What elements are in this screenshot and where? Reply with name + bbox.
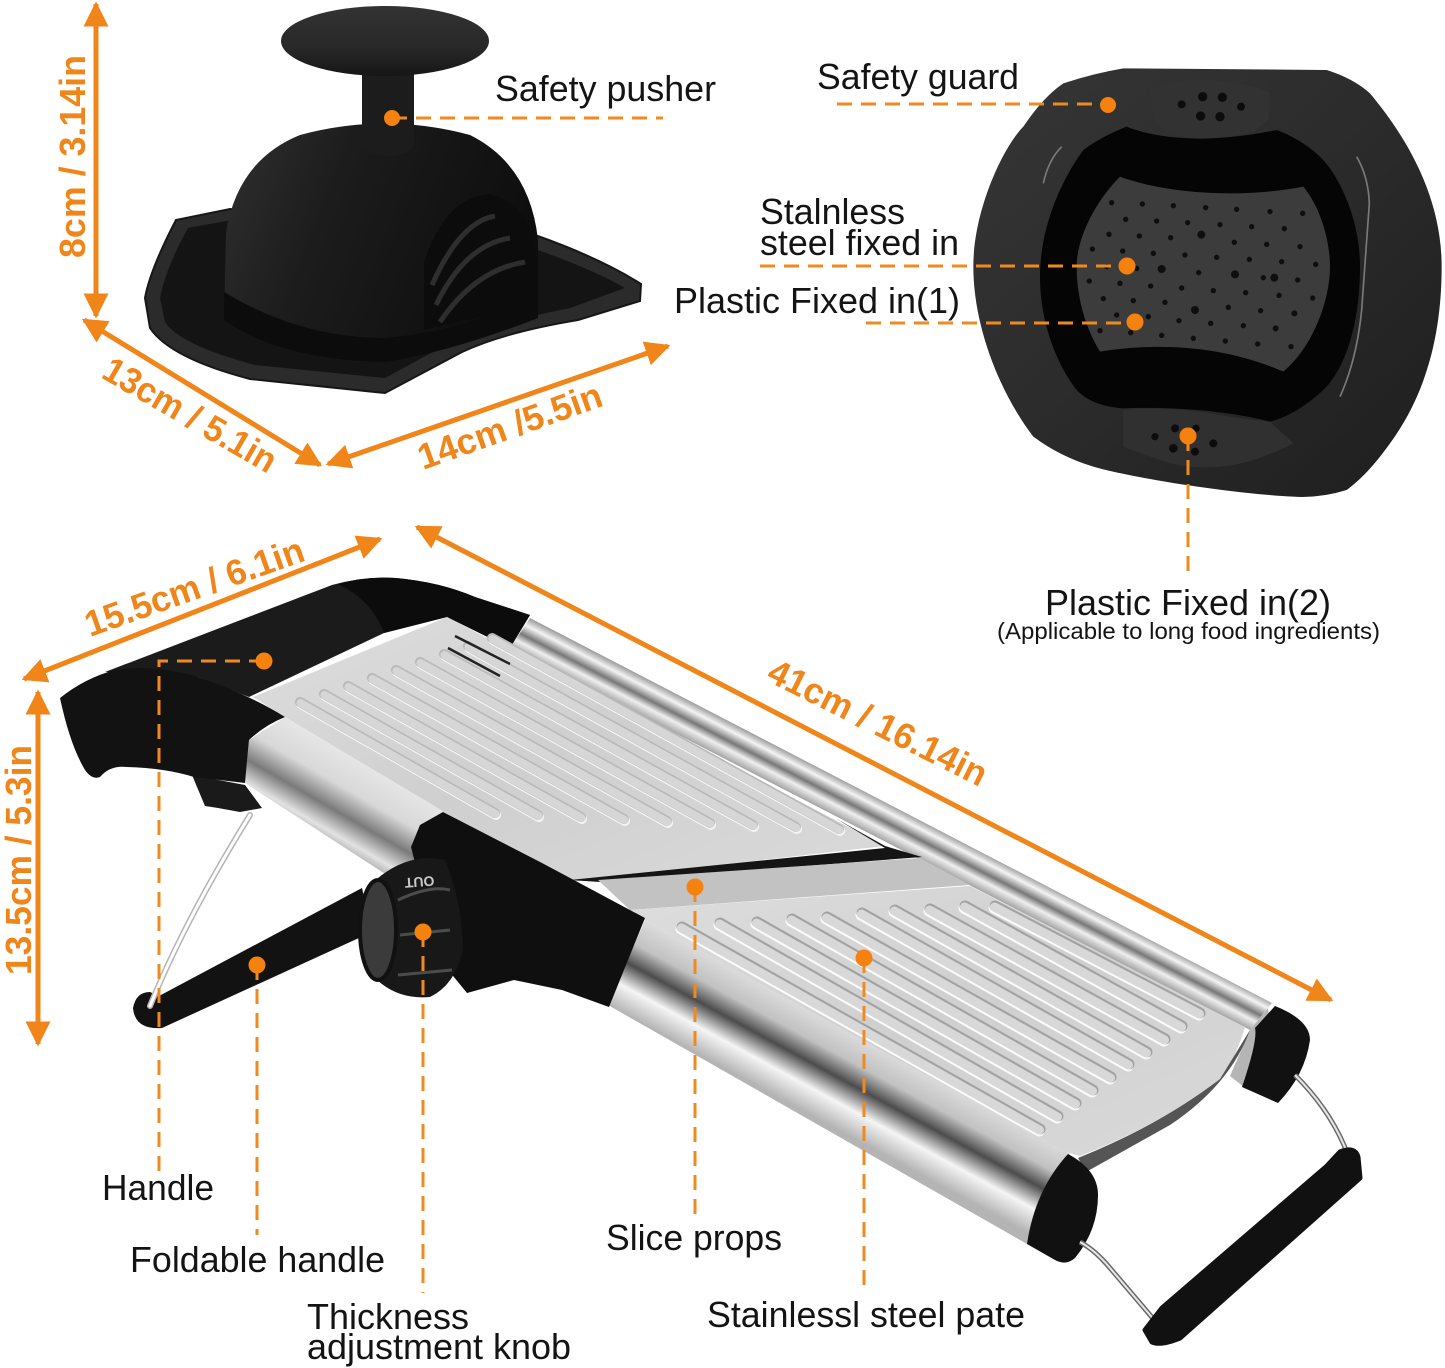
guard bottom tab — [1123, 409, 1293, 467]
callout: thickness adjustment knob: adjustment knob — [307, 1326, 571, 1367]
pusher dome window ridges — [432, 216, 525, 322]
rear handle grip — [105, 578, 530, 697]
callout: safety guard: Safety guard — [817, 56, 1019, 97]
rear end cap — [1242, 1006, 1310, 1103]
pusher dome lower band — [224, 292, 538, 362]
pusher stem — [362, 72, 414, 156]
adjustment knob — [360, 858, 463, 997]
callout: safety guard — [817, 56, 1116, 113]
folding stand wire — [150, 815, 250, 1006]
dimension: pusher depth: 13cm / 5.1in — [96, 348, 285, 481]
panel: safety pusher product — [145, 6, 641, 393]
callout: foldable handle: Foldable handle — [130, 1239, 385, 1280]
callout: plastic fixed in 2 — [997, 428, 1380, 644]
front handle grip — [60, 668, 285, 783]
front rail right section — [608, 920, 1070, 1244]
pusher base plate — [145, 209, 641, 393]
arrow: slicer height — [36, 692, 40, 1044]
front rail left section — [245, 717, 480, 890]
arrow: slicer width — [24, 539, 380, 679]
dimension: slicer width: 15.5cm / 6.1in — [79, 529, 309, 645]
callout: stainless steel fixed in: steel fixed in — [760, 222, 959, 263]
pusher base inner well — [160, 220, 625, 378]
callout: foldable handle — [130, 956, 385, 1280]
pusher dome — [224, 124, 538, 362]
callout: plastic fixed in 1 — [674, 280, 1144, 330]
rear support bar — [1145, 1150, 1360, 1343]
rear rail end piece — [1230, 1008, 1272, 1088]
left plate ribs — [300, 638, 840, 831]
callout: safety pusher — [384, 68, 716, 126]
foldable handle bar — [133, 888, 372, 1028]
arrow: pusher width — [328, 346, 668, 464]
pusher top knob — [281, 6, 489, 76]
right stainless plate — [630, 886, 1245, 1156]
knob grooves — [398, 889, 452, 975]
right plate end shadow — [1078, 1030, 1250, 1172]
guard bottom tab holes — [1151, 424, 1217, 456]
dimension: pusher height: 8cm / 3.14in — [52, 55, 93, 258]
callout: plastic fixed in 2: (Applicable to long food ingredients) — [997, 618, 1380, 644]
callout: handle: Handle — [102, 1167, 214, 1208]
knob body — [372, 858, 463, 997]
knob face — [360, 880, 396, 980]
knob label: OUT — [404, 873, 435, 891]
callout: safety pusher: Safety pusher — [495, 68, 716, 109]
callout: stainless steel fixed in: Stalnless — [760, 191, 905, 232]
guard inner opening — [1040, 127, 1360, 422]
slice props band — [598, 858, 970, 910]
callout: stainless steel fixed in — [760, 191, 1136, 274]
callout: handle — [102, 652, 272, 1208]
rear rail — [510, 618, 1272, 1030]
front end cap — [1027, 1154, 1098, 1263]
perforated plate holes — [1087, 200, 1318, 349]
left stainless plate — [253, 617, 885, 882]
callout: plastic fixed in 2: Plastic Fixed in(2) — [1045, 582, 1331, 623]
callout: slice props — [606, 878, 782, 1258]
guard top tab — [1148, 80, 1270, 139]
dimension: slicer length: 41cm / 16.14in — [761, 650, 995, 794]
perforated plate — [1077, 177, 1330, 372]
blade gap — [570, 818, 922, 882]
arrow: pusher height — [94, 4, 98, 316]
rear handle corner — [338, 578, 530, 648]
right plate ribs — [681, 906, 1200, 1131]
pusher dome window — [424, 194, 537, 330]
stand hinge — [192, 775, 262, 812]
knob housing — [411, 812, 645, 1007]
callout: stainless steel plate: Stainlessl steel pate — [707, 1294, 1025, 1335]
dimension: pusher width: 14cm /5.5in — [412, 374, 608, 478]
guard side highlights — [1043, 147, 1369, 397]
arrow: slicer length — [417, 527, 1331, 1000]
arrow: pusher depth — [84, 320, 320, 465]
panel: safety guard product — [973, 68, 1442, 497]
rear support wires — [1080, 1075, 1346, 1322]
callout: plastic fixed in 1: Plastic Fixed in(1) — [674, 280, 960, 321]
callout: thickness adjustment knob — [307, 924, 571, 1367]
callout: slice props: Slice props — [606, 1217, 782, 1258]
callout: stainless steel plate — [707, 950, 1025, 1335]
guard top tab holes — [1178, 92, 1245, 121]
panel: mandoline slicer product — [60, 578, 1360, 1343]
callout: thickness adjustment knob: Thickness — [307, 1296, 469, 1337]
guard outer shell — [973, 68, 1442, 497]
plate slots — [448, 636, 510, 676]
